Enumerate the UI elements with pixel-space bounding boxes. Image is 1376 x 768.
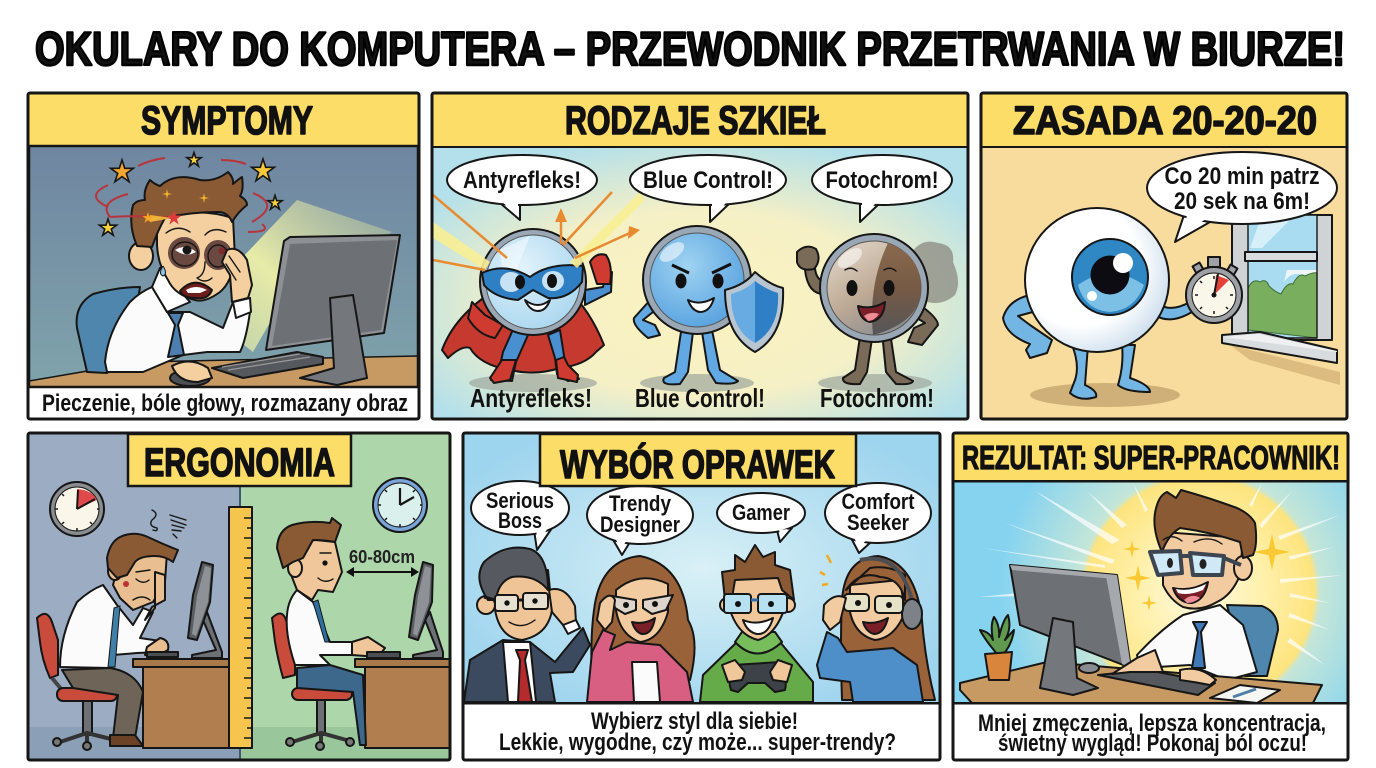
window bbox=[1222, 215, 1337, 363]
speech bubble: antyrefleks: Antyrefleks! bbox=[463, 167, 581, 194]
person: trendy designer bbox=[587, 556, 695, 702]
speech bubble: trendy designer bbox=[587, 486, 693, 555]
person: serious boss bbox=[464, 548, 590, 702]
caption: wybór oprawek bbox=[499, 708, 896, 756]
heading: rodzaje szkieł bbox=[433, 94, 967, 146]
person: gamer bbox=[700, 545, 813, 702]
panel: symptomy bbox=[28, 93, 419, 419]
desk: right bbox=[355, 659, 451, 748]
speech bubble: comfort seeker: Seeker bbox=[847, 510, 909, 535]
speech bubble: comfort seeker bbox=[825, 483, 931, 553]
caption: symptomy: Pieczenie, bóle głowy, rozmazany obraz bbox=[42, 390, 408, 417]
rays: reflected light bbox=[433, 192, 645, 270]
heading: symptomy bbox=[29, 94, 418, 146]
character: fotochrom lens bbox=[797, 234, 958, 392]
ruler bbox=[229, 507, 252, 748]
speech bubble: trendy designer: Trendy bbox=[609, 491, 672, 516]
heading: rodzaje szkieł: RODZAJE SZKIEŁ bbox=[565, 99, 826, 143]
character: antyrefleks lens bbox=[442, 229, 612, 392]
label: antyrefleks: Antyrefleks! bbox=[470, 383, 592, 413]
panel: zasada 20-20-20 bbox=[981, 93, 1347, 419]
speech bubble: comfort seeker: Comfort bbox=[842, 489, 915, 514]
speech bubble: 20 sek na 6m! bbox=[1174, 188, 1310, 215]
clock: slow bbox=[50, 482, 104, 536]
caption: wybór oprawek: Lekkie, wygodne, czy może... super-trendy? bbox=[499, 729, 896, 756]
person: upright worker bbox=[272, 518, 400, 750]
speech bubble: serious boss bbox=[471, 481, 569, 550]
speech bubble: serious boss: Serious bbox=[486, 488, 554, 513]
caption: rezultat bbox=[978, 710, 1326, 757]
illustration: lens characters bbox=[433, 146, 967, 418]
speech bubble: Co 20 min patrz bbox=[1164, 163, 1320, 190]
panel: rezultat bbox=[953, 433, 1348, 760]
illustration: tired office worker bbox=[29, 146, 418, 387]
speech bubble: antyrefleks bbox=[447, 155, 597, 220]
heading: zasada 20-20-20: ZASADA 20-20-20 bbox=[1013, 99, 1317, 143]
speech bubble: serious boss: Boss bbox=[498, 508, 542, 533]
heading: wybór oprawek: WYBÓR OPRAWEK bbox=[560, 441, 835, 487]
plant bbox=[980, 615, 1014, 680]
speech bubble: trendy designer: Designer bbox=[600, 512, 680, 537]
notepad bbox=[1210, 685, 1280, 703]
distance label bbox=[346, 547, 419, 577]
illustration: four glasses wearers bbox=[464, 434, 939, 703]
panel: wybór oprawek bbox=[463, 433, 940, 760]
speech bubble: gamer: Gamer bbox=[732, 500, 790, 525]
speech bubble: blue control bbox=[630, 155, 786, 222]
monitor: right bbox=[409, 562, 443, 658]
illustration: bad and good posture bbox=[29, 434, 451, 759]
keyboard bbox=[1098, 670, 1215, 695]
label: blue control: Blue Control! bbox=[635, 383, 765, 413]
stress squiggles bbox=[151, 510, 186, 538]
clock: calm bbox=[373, 478, 427, 532]
stopwatch bbox=[1186, 257, 1242, 323]
heading: ergonomia bbox=[128, 434, 351, 486]
illustration: happy worker bbox=[954, 480, 1347, 703]
label: fotochrom: Fotochrom! bbox=[820, 383, 934, 413]
speech bubble: fotochrom bbox=[812, 155, 952, 222]
heading: wybór oprawek bbox=[540, 434, 856, 487]
speech bubble bbox=[1147, 152, 1337, 242]
panel: rodzaje szkieł bbox=[432, 93, 968, 419]
speech bubble: blue control: Blue Control! bbox=[643, 167, 773, 194]
desk: left bbox=[133, 659, 229, 748]
distance label: 60-80cm bbox=[349, 547, 415, 567]
computer monitor bbox=[1010, 565, 1131, 695]
heading: ergonomia: ERGONOMIA bbox=[144, 441, 335, 485]
character: blue control lens bbox=[634, 226, 783, 392]
person: slouching worker bbox=[37, 534, 178, 750]
illustration: eyeball with stopwatch bbox=[982, 146, 1346, 418]
monitor: left bbox=[188, 562, 222, 658]
desk bbox=[960, 662, 1322, 703]
speech bubble: gamer bbox=[717, 493, 805, 542]
panel: ergonomia bbox=[28, 433, 451, 760]
heading: symptomy: SYMPTOMY bbox=[141, 99, 313, 143]
speech bubble: fotochrom: Fotochrom! bbox=[826, 167, 938, 194]
person: comfort seeker bbox=[817, 555, 935, 702]
caption: wybór oprawek: Wybierz styl dla siebie! bbox=[591, 708, 798, 735]
